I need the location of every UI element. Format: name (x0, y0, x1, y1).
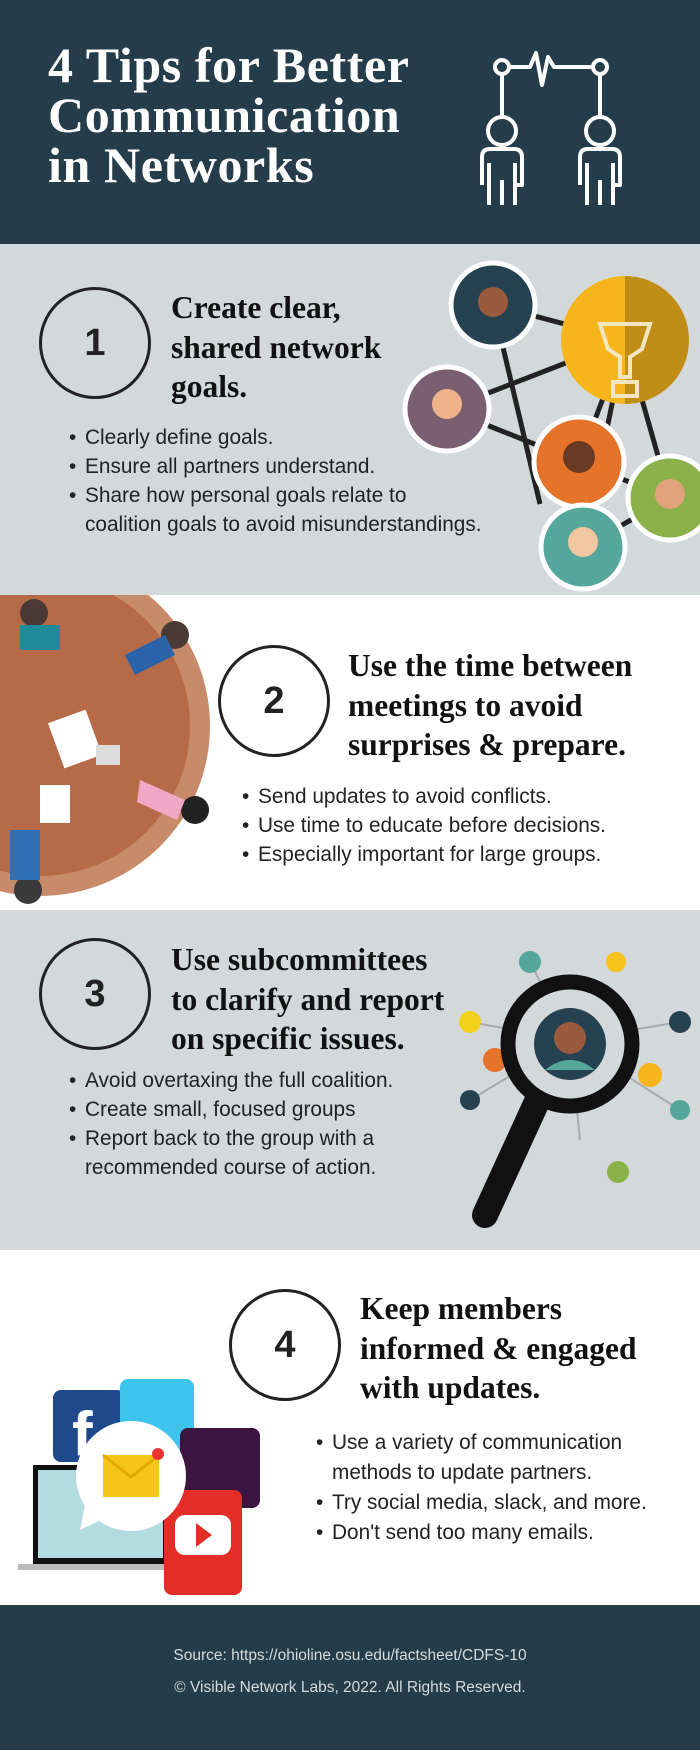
heading 1 (171, 290, 382, 404)
panel: tip 3 (0, 910, 700, 1250)
heading 4: Keep members (360, 1291, 562, 1326)
bullets 4 (316, 1431, 647, 1544)
number 1: 1 (84, 322, 106, 364)
illustration: meeting table (0, 595, 210, 904)
bullets 2: Especially important for large groups. (258, 843, 601, 866)
heading 4: informed & engaged (360, 1330, 636, 1366)
bullets 1: Clearly define goals. (85, 426, 273, 449)
icon: connected people (480, 50, 622, 205)
bullets 3: Create small, focused groups (85, 1098, 356, 1121)
panel: tip 1 (0, 244, 700, 595)
heading 4 (360, 1291, 636, 1405)
bullets 1: Share how personal goals relate to (85, 484, 406, 507)
illustration: communication apps: f (72, 1400, 93, 1469)
title (48, 37, 410, 193)
bullets 3: recommended course of action. (85, 1156, 376, 1179)
bullets 1: Ensure all partners understand. (85, 455, 375, 478)
heading 1: goals. (171, 369, 247, 404)
bullets 4: Use a variety of communication (332, 1431, 622, 1454)
heading 3: to clarify and report (171, 982, 444, 1016)
bullets 2 (242, 785, 606, 866)
number 3 (39, 938, 151, 1050)
copyright: © Visible Network Labs, 2022. All Rights Reserved. (174, 1679, 526, 1696)
number 4: 4 (274, 1324, 296, 1366)
illustration: communication apps (18, 1379, 260, 1595)
heading 3 (171, 942, 444, 1056)
heading 1: Create clear, (171, 290, 341, 325)
title: 4 Tips for Better (48, 37, 410, 93)
title: in Networks (48, 137, 314, 193)
panel: tip 4 (0, 1250, 700, 1605)
number 2: 2 (263, 680, 285, 722)
heading 2: surprises & prepare. (348, 727, 626, 762)
heading 2: Use the time between (348, 648, 632, 683)
heading 3: Use subcommittees (171, 942, 427, 977)
bullets 4: Don't send too many emails. (332, 1521, 594, 1544)
bullets 3: Report back to the group with a (85, 1127, 374, 1150)
bullets 1: coalition goals to avoid misunderstandings. (85, 513, 482, 536)
panel: tip 2 (0, 595, 700, 910)
number 3: 3 (84, 972, 106, 1014)
heading 2 (348, 648, 632, 762)
bullets 1 (70, 426, 482, 536)
bullets 3 (70, 1069, 393, 1179)
illustration: magnifier network (459, 951, 691, 1228)
number 1 (39, 287, 151, 399)
heading 2: meetings to avoid (348, 688, 582, 722)
illustration: avatar network (402, 260, 700, 592)
title: Communication (48, 87, 400, 143)
number 2 (218, 645, 330, 757)
heading 4: with updates. (360, 1370, 540, 1405)
bullets 4: Try social media, slack, and more. (332, 1491, 647, 1514)
number 4 (229, 1289, 341, 1401)
bullets 2: Use time to educate before decisions. (258, 814, 606, 837)
bullets 3: Avoid overtaxing the full coalition. (85, 1069, 393, 1092)
heading 3: on specific issues. (171, 1021, 405, 1056)
header (0, 0, 700, 244)
bullets 2: Send updates to avoid conflicts. (258, 785, 552, 808)
heading 1: shared network (171, 330, 381, 364)
footer (0, 1605, 700, 1750)
bullets 4: methods to update partners. (332, 1461, 592, 1484)
source text: Source: https://ohioline.osu.edu/factsheet/CDFS-10 (173, 1647, 527, 1664)
